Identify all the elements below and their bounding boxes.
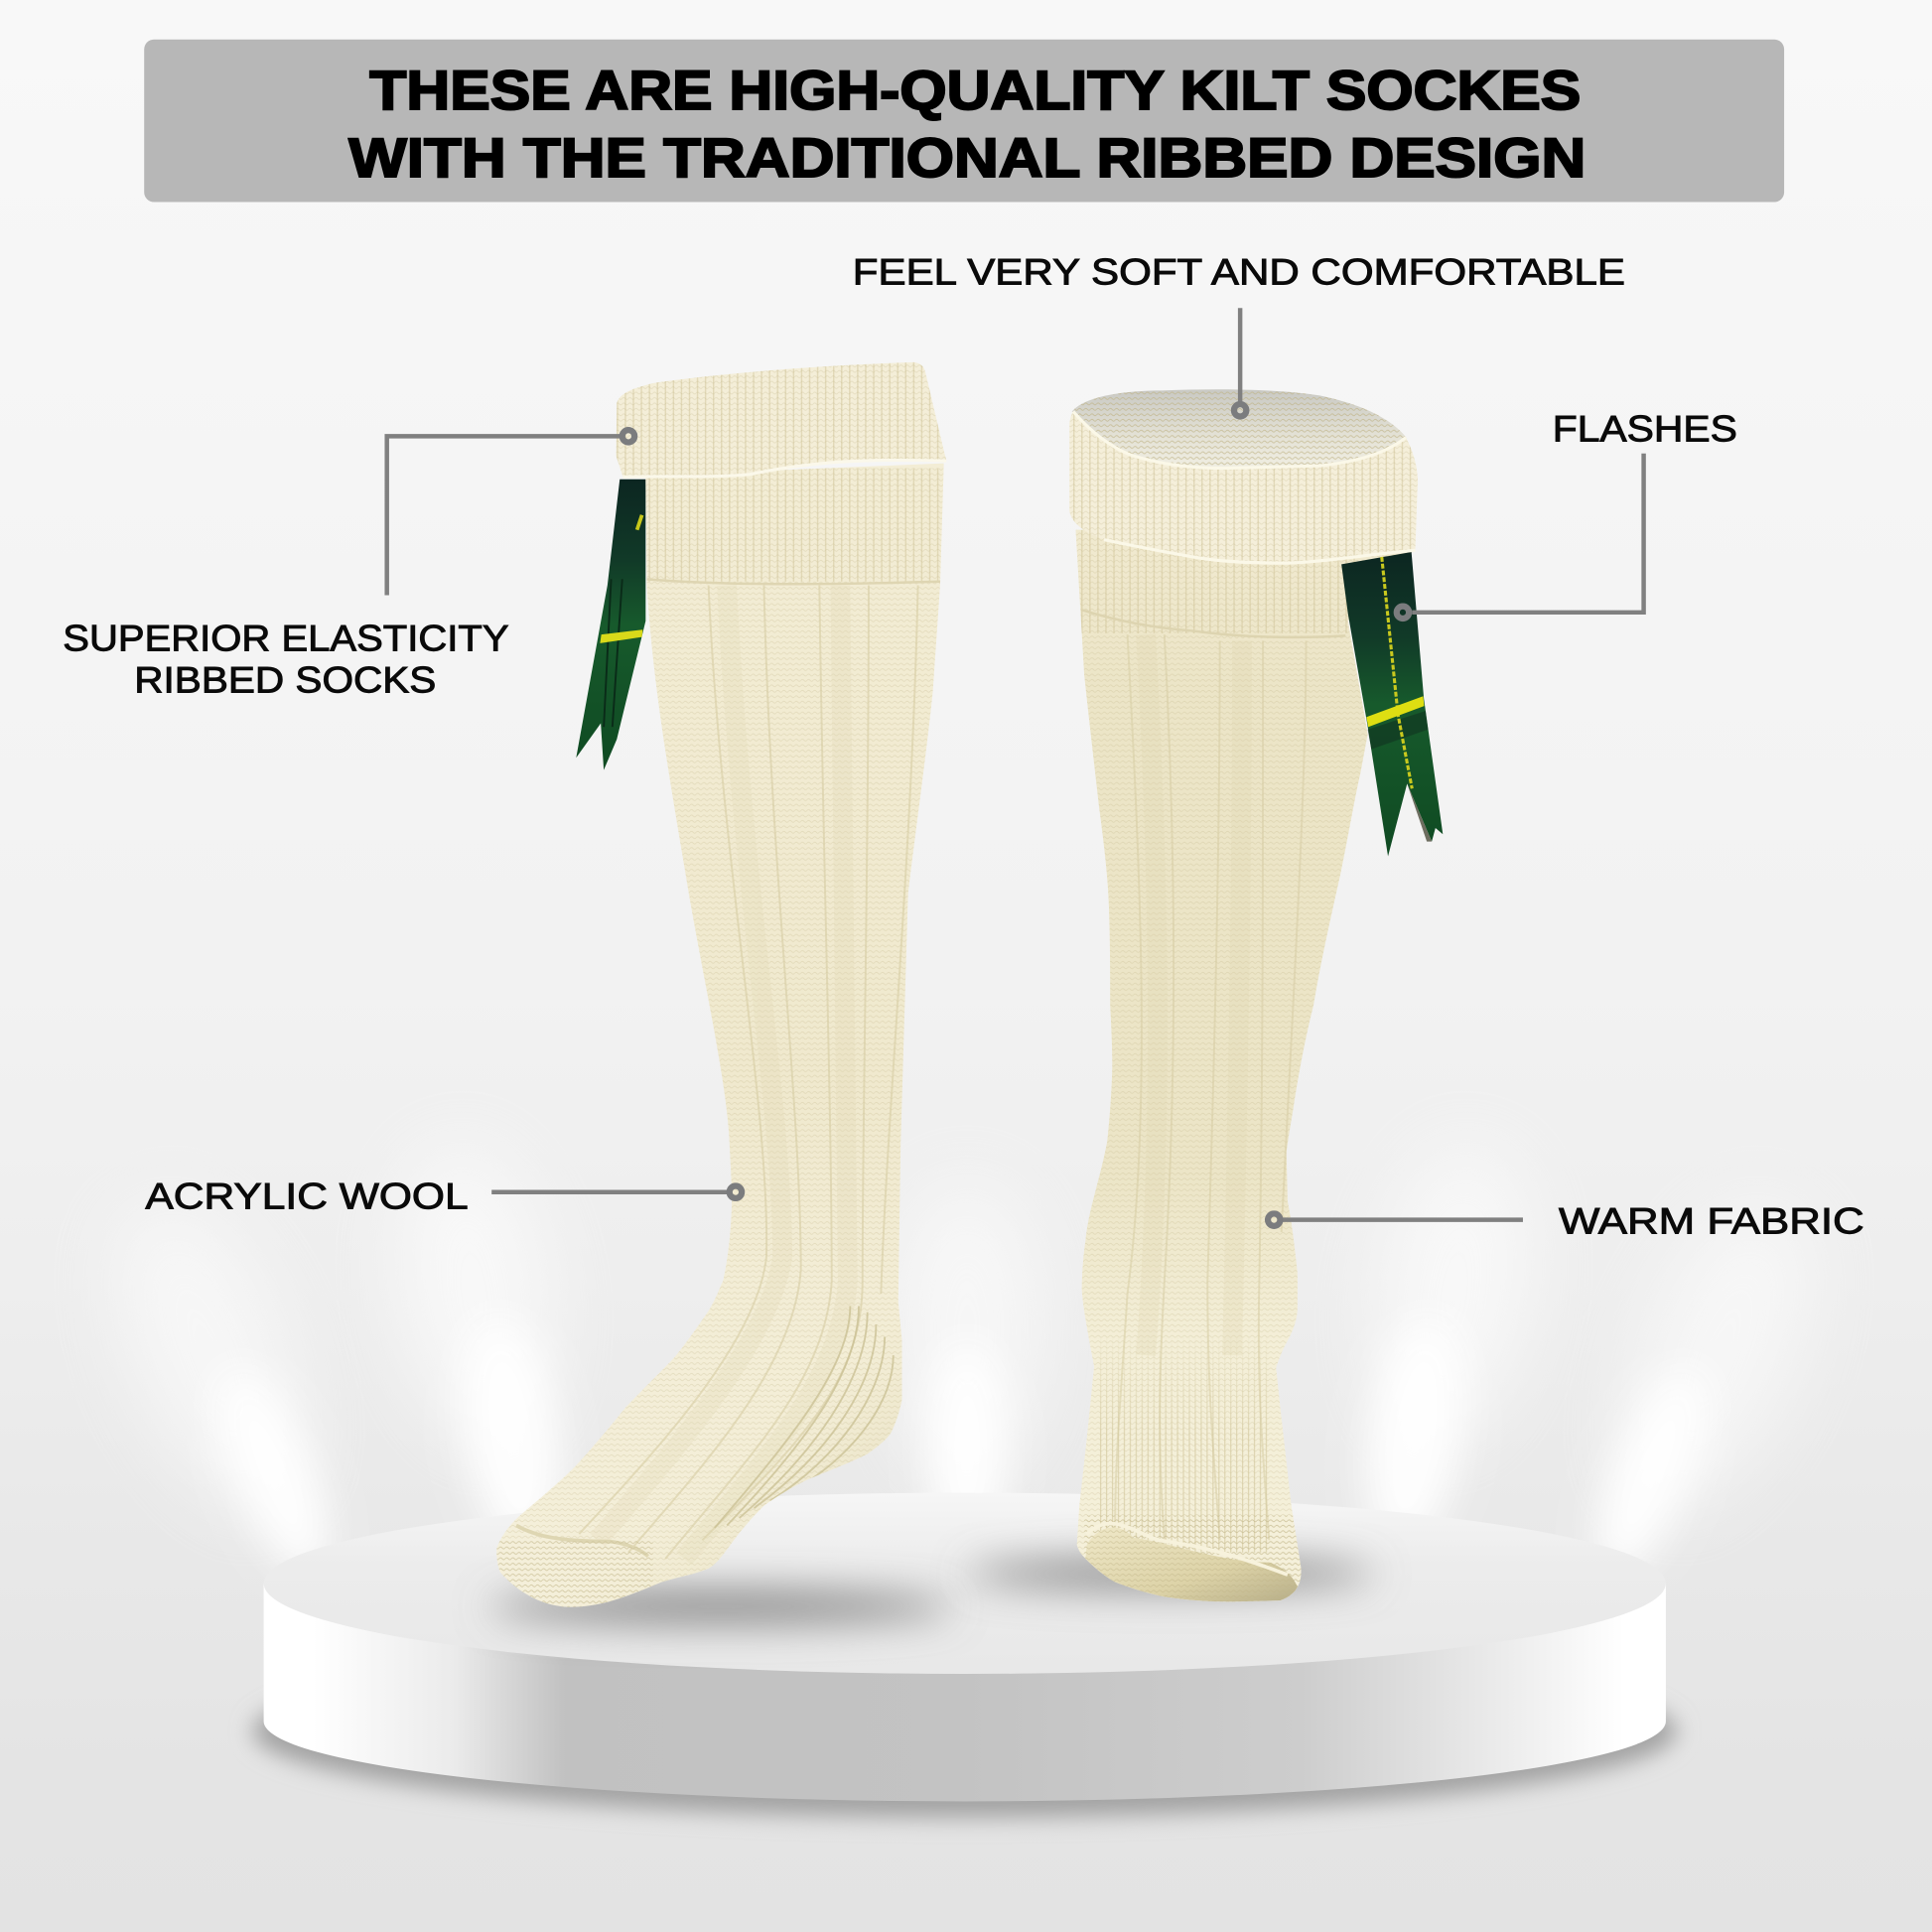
callout: feel very soft and comfortable: FEEL VERY SOFT AND COMFORTABLE	[853, 251, 1625, 293]
cuff left	[617, 362, 946, 477]
callout: flashes: FLASHES	[1553, 407, 1737, 449]
callout: acrylic wool: ACRYLIC WOOL	[145, 1174, 469, 1216]
podium	[252, 1493, 1677, 1818]
foot shadow left	[489, 1591, 952, 1621]
sock body left	[496, 464, 944, 1607]
flash: right	[1341, 552, 1443, 857]
left sock	[492, 362, 961, 1626]
ribs and knit right	[1076, 530, 1395, 1602]
callout: flashes	[1397, 407, 1737, 619]
podium side	[264, 1584, 1666, 1801]
title banner	[144, 40, 1784, 203]
foot ribs right	[1097, 1337, 1269, 1553]
flash: left	[576, 480, 645, 770]
title line 1: THESE ARE HIGH-QUALITY KILT SOCKES	[369, 59, 1581, 121]
podium top	[264, 1493, 1666, 1674]
foot shadow right	[967, 1560, 1374, 1587]
ribs and knit left	[492, 469, 961, 1626]
sock body right	[1075, 530, 1415, 1601]
cuff right	[1069, 412, 1418, 563]
podium ground shadow	[252, 1645, 1677, 1818]
callout: warm fabric: WARM FABRIC	[1559, 1199, 1864, 1241]
right sock	[1069, 389, 1443, 1614]
callout: feel very soft and comfortable	[853, 251, 1625, 416]
callout: superior elasticity ribbed socks: RIBBED SOCKS	[134, 658, 436, 700]
sock opening interior	[1072, 389, 1407, 469]
callout: superior elasticity ribbed socks	[63, 430, 634, 700]
callout: warm fabric	[1268, 1199, 1864, 1241]
toe right	[1085, 1528, 1298, 1601]
light beams	[81, 1137, 1848, 1590]
toe seam left	[516, 1525, 648, 1556]
title line 2: WITH THE TRADITIONAL RIBBED DESIGN	[348, 126, 1586, 189]
callout: acrylic wool	[145, 1174, 742, 1216]
callout: superior elasticity ribbed socks: SUPERIOR ELASTICITY	[63, 617, 509, 658]
